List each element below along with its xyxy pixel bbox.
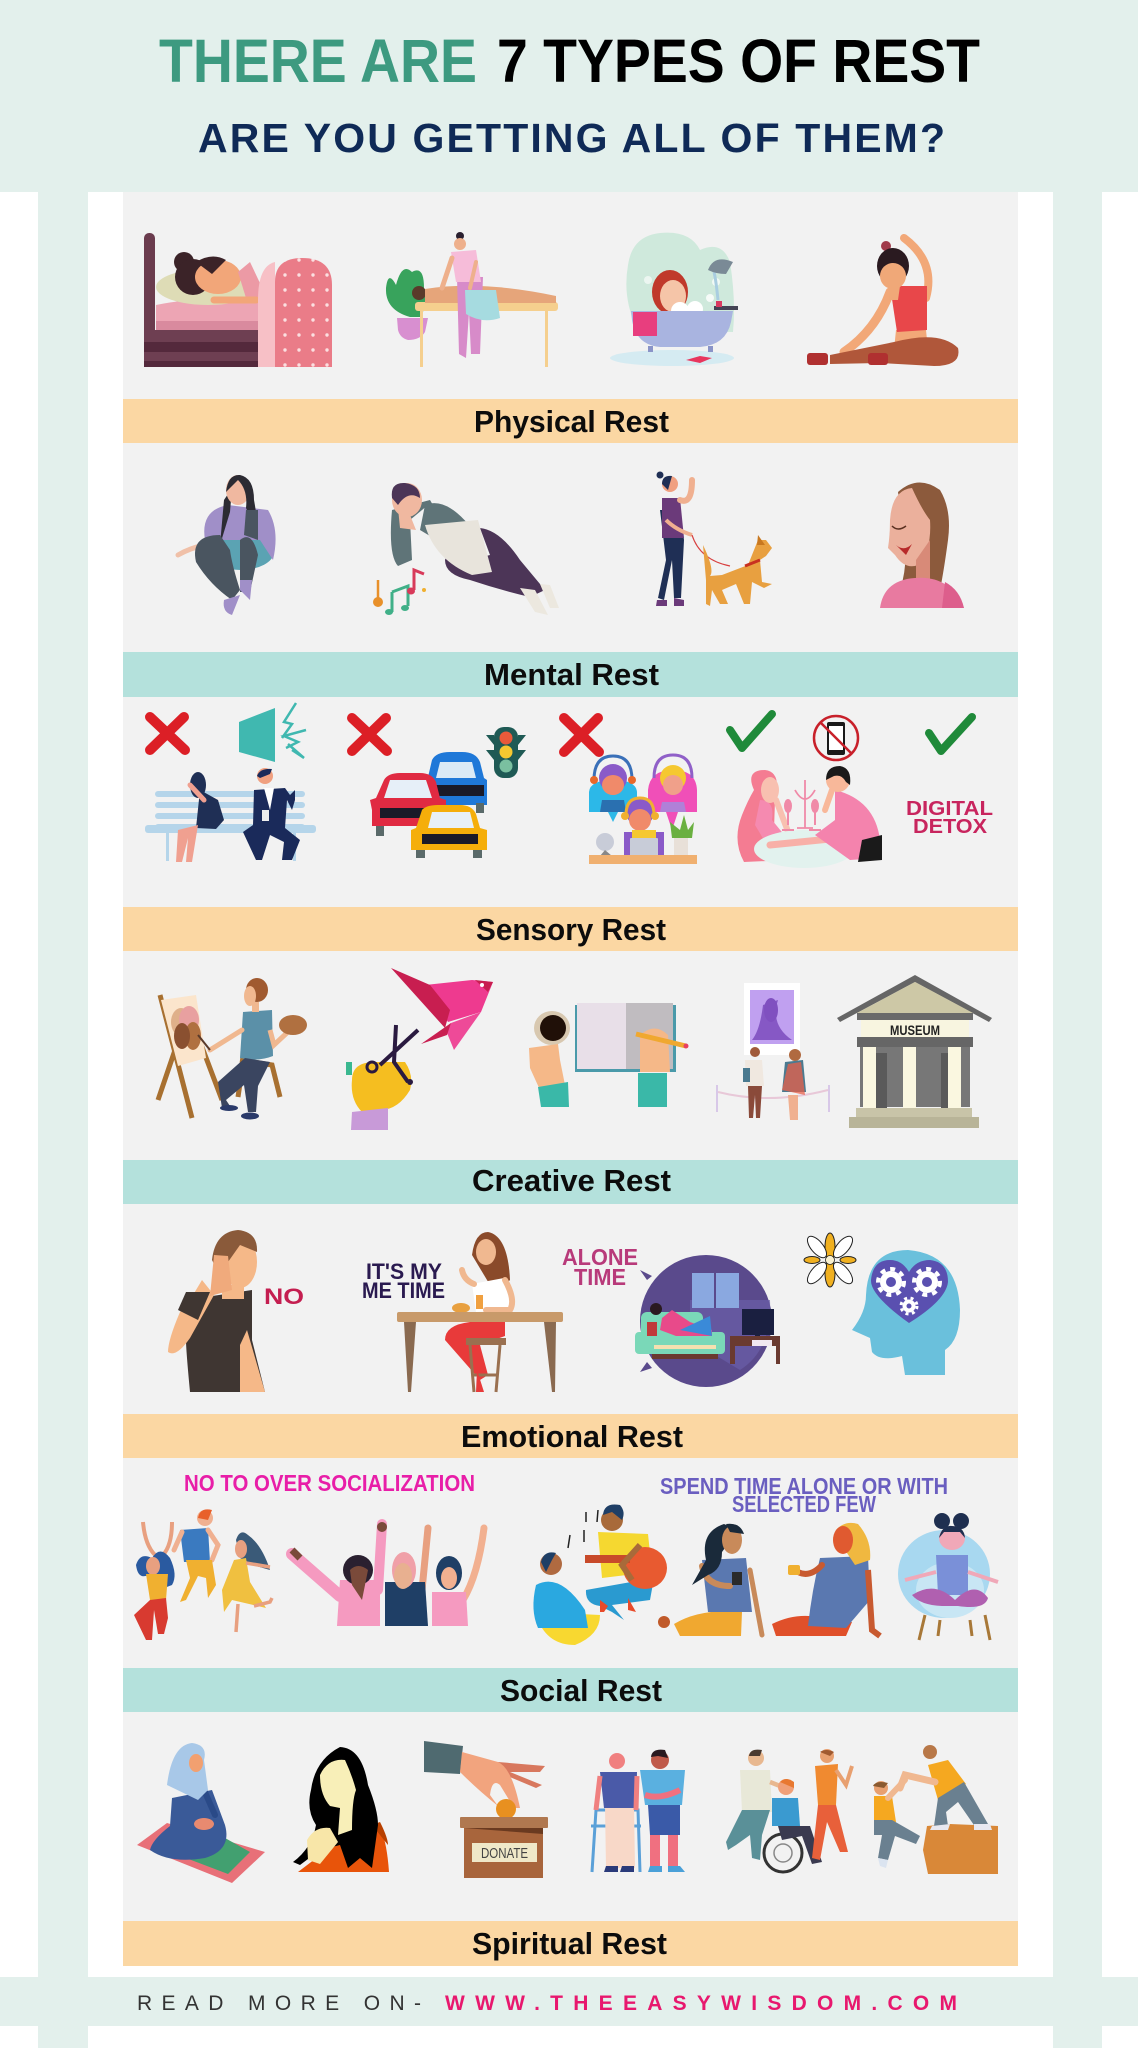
text: spend time alone: SPEND TIME ALONE OR WITH <box>660 1473 948 1499</box>
icon: art gallery visitors <box>717 983 829 1120</box>
icon: man resting on pillow with music <box>373 483 559 615</box>
text: it's my me time: ME TIME <box>362 1278 445 1303</box>
icon: museum building: MUSEUM <box>890 1022 940 1038</box>
icon: woman sleeping in bed <box>144 233 332 367</box>
band: spiritual rest: Spiritual Rest <box>472 1926 667 1961</box>
icon: woman sitting with eyes closed <box>178 475 276 615</box>
icon: woman praying <box>293 1747 389 1872</box>
band: social rest: Social Rest <box>500 1673 662 1708</box>
text: digital detox: DIGITAL <box>906 798 993 820</box>
band: mental rest <box>123 652 1018 697</box>
icon: cheering crowd <box>292 1522 484 1626</box>
icon: green check one <box>730 714 772 748</box>
icon: painter at easel <box>158 978 307 1120</box>
footer <box>0 1977 1138 2026</box>
text: no: NO <box>264 1284 304 1309</box>
title <box>159 27 980 95</box>
text: alone time <box>562 1244 638 1290</box>
panel: social rest <box>123 1458 1018 1668</box>
text: spend time alone <box>660 1473 948 1517</box>
icon: alone time on sofa <box>635 1255 780 1387</box>
text: spend time alone: SELECTED FEW <box>732 1491 876 1517</box>
band: creative rest: Creative Rest <box>472 1163 671 1198</box>
icon: yoga stretch <box>807 238 958 366</box>
icon: hand with scissors <box>349 1025 418 1130</box>
band: sensory rest <box>123 907 1018 951</box>
panel: sensory rest <box>123 697 1018 907</box>
band: mental rest: Mental Rest <box>484 657 659 692</box>
text: digital detox: DETOX <box>913 816 988 838</box>
icon: massage <box>386 232 558 367</box>
icon: woman praying on rug <box>137 1743 265 1883</box>
icon: couple at candlelit dinner <box>737 766 882 868</box>
icon: red cross two <box>352 718 387 751</box>
band: creative rest <box>123 1160 1018 1204</box>
icon: woman walking a dog <box>656 472 772 606</box>
panel: mental rest <box>123 443 1018 652</box>
icon: red cross one <box>150 717 185 750</box>
icon: no phone sign <box>814 716 858 760</box>
icon: cars in traffic <box>370 752 487 858</box>
band: emotional rest <box>123 1414 1018 1458</box>
title: THERE ARE <box>159 27 477 95</box>
panel: spiritual rest <box>123 1712 1018 1921</box>
band: physical rest: Physical Rest <box>474 404 669 439</box>
panel: creative rest <box>123 951 1018 1160</box>
icon: kids on video call <box>589 755 697 864</box>
text: digital detox <box>906 798 993 838</box>
text: alone time: TIME <box>574 1264 626 1290</box>
header band <box>0 0 1138 192</box>
icon: helping climber <box>873 1745 998 1874</box>
panel: emotional rest <box>123 1204 1018 1414</box>
icon: people helping wheelchair user <box>726 1749 852 1872</box>
band: spiritual rest <box>123 1921 1018 1966</box>
icon: three dancers <box>134 1509 272 1640</box>
icon: couple on bench <box>145 768 316 862</box>
icon: friends with guitar <box>533 1504 667 1645</box>
subtitle: ARE YOU GETTING ALL OF THEM? <box>198 115 945 161</box>
icon: origami bird <box>391 968 493 1050</box>
icon: hand dropping coin in donation box: DONATE <box>481 1845 528 1862</box>
icon: notebook, coffee and hands <box>529 1003 688 1107</box>
text: website url: WWW.THEEASYWISDOM.COM <box>445 1992 957 2015</box>
title: 7 TYPES OF REST <box>497 27 980 95</box>
band: emotional rest: Emotional Rest <box>461 1419 683 1454</box>
panel: physical rest <box>123 192 1018 399</box>
text: no to over socialization: NO TO OVER SOCIALIZATION <box>184 1470 475 1496</box>
band: sensory rest: Sensory Rest <box>476 912 666 947</box>
icon: two women talking with coffee <box>658 1523 880 1636</box>
text: it's my me time: IT'S MY <box>366 1259 442 1284</box>
icon: helping elderly man with walker <box>591 1750 685 1872</box>
icon: bubble bath <box>610 233 738 366</box>
icon: head with gear heart <box>852 1250 960 1375</box>
icon: loudspeaker <box>239 703 306 762</box>
band: social rest <box>123 1668 1018 1712</box>
icon: green check two <box>929 717 972 751</box>
text: it's my me time <box>362 1259 445 1303</box>
text: read more on: READ MORE ON- <box>137 1992 421 2015</box>
icon: traffic light <box>486 727 526 778</box>
icon: woman meditating in chair <box>898 1513 998 1640</box>
icon: hand dropping coin in donation box <box>424 1741 548 1878</box>
icon: red cross three <box>564 718 599 752</box>
icon: woman at table <box>397 1232 563 1392</box>
text: alone time: ALONE <box>562 1244 638 1270</box>
band: physical rest <box>123 399 1018 443</box>
icon: flower <box>804 1233 856 1287</box>
icon: smiling woman profile <box>880 482 964 608</box>
icon: tired man holding head <box>168 1230 265 1392</box>
icon: museum building <box>837 975 992 1128</box>
